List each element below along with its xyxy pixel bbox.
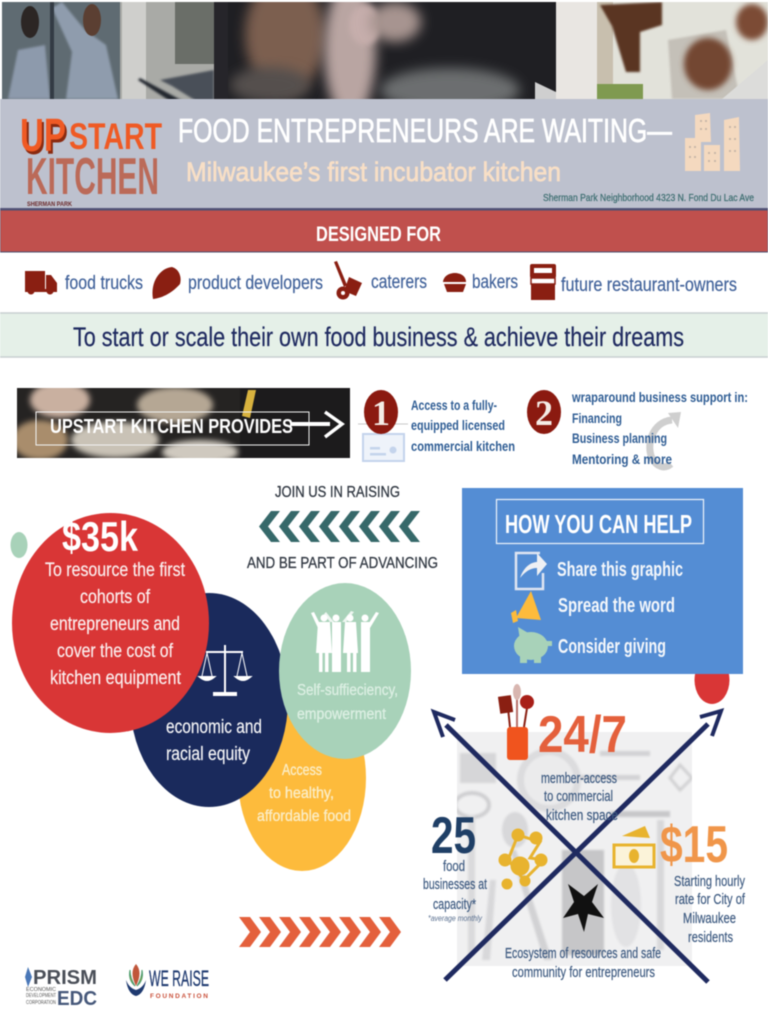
icon: megaphone [511, 591, 541, 623]
icon: certificate [363, 434, 404, 461]
text: access [411, 397, 515, 454]
bubble: $35k: To resource the first [45, 560, 186, 581]
arrow [290, 412, 342, 437]
logo: we raise foundation: FOUNDATION [150, 993, 208, 1000]
upstart kitchen logo: START [69, 116, 162, 157]
bubble: access to food [238, 685, 366, 871]
label: share: Share this graphic [557, 559, 683, 581]
bubble: $35k: entrepreneurs and [50, 614, 180, 635]
logo: prism edc: ECONOMIC [26, 987, 56, 993]
orange chevrons [239, 917, 401, 947]
text: ecosystem: community for entrepreneurs [512, 964, 655, 981]
stat: $15: Milwaukee [683, 910, 736, 927]
label: future restaurant-owners: future restaurant-owners [561, 275, 737, 296]
icon: scales [200, 645, 250, 694]
logo: prism edc: EDC [57, 988, 97, 1010]
upstart kitchen logo [20, 109, 162, 208]
stat: $15 [660, 816, 746, 946]
bubble: access to food: to healthy, [269, 785, 334, 802]
text: support: Mentoring & more [572, 451, 672, 467]
provides banner [16, 387, 351, 459]
stat: $15: rate for City of [675, 891, 746, 908]
small green dot [10, 532, 28, 558]
upstart kitchen logo: UP [20, 109, 66, 161]
bubble: access to food: Access [282, 762, 322, 779]
bubble: $35k: kitchen equipment [50, 668, 182, 689]
icon: hands star [563, 884, 604, 932]
icon: taco [152, 267, 181, 299]
label: spread: Spread the word [558, 595, 675, 617]
bubble: self-sufficiency: Self-suffieciency, [297, 682, 398, 699]
bubble: equity: economic and [166, 717, 262, 738]
stat: $15: $15 [660, 816, 728, 874]
text: ecosystem [505, 945, 661, 981]
bubble: access to food: affordable food [257, 808, 351, 825]
logo: prism edc: CORPORATION [26, 1000, 56, 1006]
stat: 25: *average monthly [428, 914, 483, 923]
designed for banner [0, 210, 768, 252]
heading: advancing: AND BE PART OF ADVANCING [247, 555, 438, 572]
number 2 [527, 390, 561, 434]
label: food trucks: food trucks [65, 273, 143, 294]
icon: share [516, 553, 547, 589]
icon: storefront [530, 264, 556, 300]
bubble: equity [130, 593, 288, 807]
text: support [571, 389, 748, 467]
teal chevrons [259, 511, 420, 542]
icon: hand truck [334, 261, 362, 300]
bubble: $35k: cohorts of [80, 587, 151, 608]
stat: $15: residents [688, 929, 733, 946]
stat: 25: capacity* [433, 896, 476, 913]
icon: money [614, 826, 654, 867]
logo: we raise foundation: WE RAISE [149, 966, 209, 991]
icon: network [499, 829, 547, 889]
bubble: equity: racial equity [166, 744, 250, 765]
text: ecosystem: Ecosystem of resources and safe [505, 945, 661, 962]
icon: piggy bank [514, 627, 552, 663]
bubble: $35k: $35k [62, 513, 139, 560]
number 1 [358, 390, 408, 434]
panel: how you can help [462, 488, 743, 674]
crossing arrows [434, 711, 721, 982]
icon: pie [443, 273, 466, 292]
stat: 25: 25 [431, 807, 476, 865]
logo: we raise foundation [126, 964, 209, 1000]
upstart kitchen logo: KITCHEN [26, 148, 159, 206]
label: bakers: bakers [472, 272, 518, 293]
stat: 24/7: kitchen space [546, 807, 618, 824]
stat: 25: businesses at [423, 876, 488, 893]
text: support: Financing [572, 410, 622, 426]
text: support: Business planning [572, 430, 667, 446]
logo: prism edc: DEVELOPMENT [26, 993, 56, 999]
text: access: commercial kitchen [411, 438, 515, 454]
number 2: 2 [535, 393, 553, 433]
stat: 24/7 [498, 684, 627, 824]
help heading [496, 500, 704, 544]
number 1: 1 [372, 393, 390, 433]
stat: $15: Starting hourly [674, 873, 745, 890]
logo: prism edc [25, 967, 97, 1010]
mission band [0, 313, 768, 357]
bubble: $35k: cover the cost of [57, 641, 174, 662]
upstart kitchen logo: UP [22, 112, 68, 164]
icon: food truck [25, 271, 57, 294]
audience row [25, 261, 737, 300]
bubble: $35k [12, 513, 209, 733]
header band [0, 99, 768, 210]
bubble: self-sufficiency [279, 583, 411, 759]
red circle behind help panel [694, 656, 730, 704]
icon: raised-arm people [311, 611, 379, 672]
icon: buildings [685, 113, 740, 171]
label: give: Consider giving [558, 636, 666, 658]
text: access: Access to a fully- [411, 397, 497, 413]
text: access: equipped licensed [411, 417, 505, 433]
logo: prism edc: PRISM [33, 967, 97, 989]
photo banner [1, 1, 768, 100]
label: product developers: product developers [188, 273, 323, 294]
designed for banner: DESIGNED FOR [316, 223, 441, 246]
upstart kitchen logo: SHERMAN PARK [27, 202, 73, 208]
label: caterers: caterers [371, 272, 427, 293]
stat: 24/7: to commercial [544, 788, 613, 805]
help heading: HOW YOU CAN HELP [505, 509, 692, 539]
heading: join us: JOIN US IN RAISING [275, 484, 400, 501]
stat: 25: food [443, 858, 465, 875]
icon: grey refresh arrow [650, 412, 681, 467]
stat: 24/7: member-access [541, 770, 617, 787]
bubble: self-sufficiency: empowerment [297, 706, 386, 723]
item 1: kitchen access [358, 390, 515, 461]
stat: 25 [423, 807, 488, 923]
icon: utensil holder [498, 684, 534, 760]
provides banner: UPSTART KITCHEN PROVIDES [50, 416, 293, 438]
subtitle: Milwaukee’s first incubator kitchen [186, 157, 561, 187]
utensils photo [455, 732, 692, 966]
stat: 24/7: 24/7 [538, 706, 627, 764]
item 2: business support [527, 389, 748, 467]
